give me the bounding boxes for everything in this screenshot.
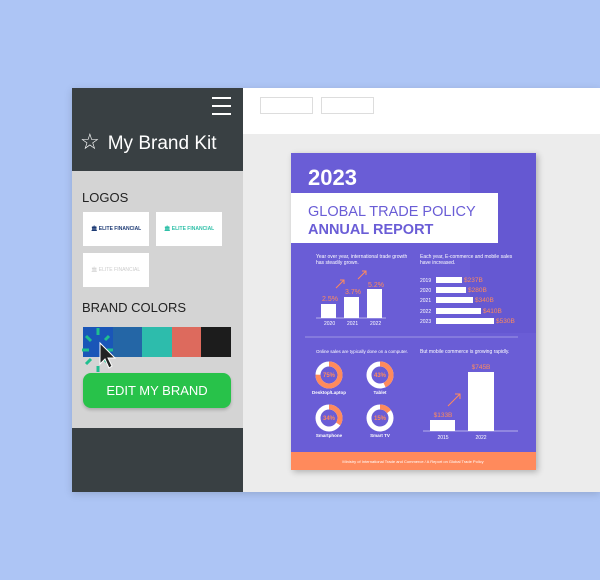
label: logos: LOGOS	[82, 190, 128, 205]
chart: e-commerce sales: 2022	[420, 309, 431, 315]
footer: Ministry of International Trade and Commerce / A Report on Global Trade Policy	[342, 459, 484, 464]
icon: cursor click	[82, 328, 116, 372]
chart: trade growth: 2022	[370, 321, 381, 327]
label: brand colors: BRAND COLORS	[82, 300, 186, 315]
chart: trade growth: 2021	[347, 321, 358, 327]
logos grid: 🏛 ELITE FINANCIAL	[164, 226, 214, 232]
top toolbar	[243, 88, 600, 134]
donut charts	[312, 349, 408, 438]
donut charts: 75%	[323, 373, 336, 379]
footer	[291, 452, 536, 470]
chart: trade growth	[316, 254, 407, 327]
chart: trade growth: 5.2%	[368, 282, 384, 289]
sidebar header	[72, 88, 243, 171]
chart: trade growth: 3.7%	[345, 289, 361, 296]
title band	[291, 193, 498, 243]
chart: e-commerce sales	[420, 254, 515, 325]
logos grid: 🏛 ELITE FINANCIAL	[91, 267, 140, 273]
donut charts: Tablet	[374, 390, 387, 395]
chart: e-commerce sales: $530B	[496, 318, 515, 325]
chart: e-commerce sales: $410B	[483, 308, 502, 315]
chart: mobile commerce: $133B	[434, 412, 452, 419]
donut charts: 15%	[374, 416, 387, 422]
icon: hamburger menu	[212, 97, 231, 115]
donut charts: Desktop/Laptop	[312, 390, 346, 395]
chart: mobile commerce: $745B	[472, 364, 490, 371]
chart: trade growth: 2020	[324, 321, 335, 327]
chart: e-commerce sales: 2020	[420, 288, 431, 294]
logos grid	[83, 212, 222, 287]
logos grid: 🏛 ELITE FINANCIAL	[91, 226, 141, 232]
chart: e-commerce sales: 2023	[420, 319, 431, 325]
sidebar footer	[72, 428, 243, 492]
chart: mobile commerce	[420, 349, 518, 441]
donut charts: Online sales are typically done on a computer.	[316, 349, 408, 354]
chart: e-commerce sales: $340B	[475, 297, 494, 304]
poster	[291, 153, 536, 470]
sidebar	[72, 88, 243, 492]
chart: mobile commerce: But mobile commerce is growing rapidly.	[420, 349, 509, 355]
color swatches	[83, 327, 231, 357]
chart: e-commerce sales: $237B	[464, 277, 483, 284]
title band: ANNUAL REPORT	[308, 222, 434, 238]
chart: e-commerce sales: $280B	[468, 287, 487, 294]
heading: My Brand Kit: ☆ My Brand Kit	[80, 129, 216, 154]
chart: mobile commerce: 2015	[437, 435, 449, 441]
title band: GLOBAL TRADE POLICY	[308, 204, 476, 220]
donut charts: 34%	[323, 416, 336, 422]
donut charts: Smartphone	[316, 433, 343, 438]
chart: mobile commerce: 2022	[475, 435, 487, 441]
chart: e-commerce sales: 2019	[420, 278, 431, 284]
chart: e-commerce sales: have increased.	[420, 260, 455, 266]
button: edit my brand	[83, 373, 231, 408]
chart: trade growth: 2.5%	[322, 296, 338, 303]
chart: e-commerce sales: Each year, E-commerce and mobile sales	[420, 254, 513, 260]
chart: e-commerce sales: 2021	[420, 298, 431, 304]
year heading: 2023	[308, 165, 357, 190]
chart: trade growth: has steadily grown.	[316, 260, 359, 266]
chart: trade growth: Year over year, international trade growth	[316, 254, 407, 260]
donut charts: Smart TV	[370, 433, 390, 438]
donut charts: 43%	[374, 373, 387, 379]
button: edit my brand: EDIT MY BRAND	[106, 383, 208, 398]
app window	[72, 88, 600, 492]
